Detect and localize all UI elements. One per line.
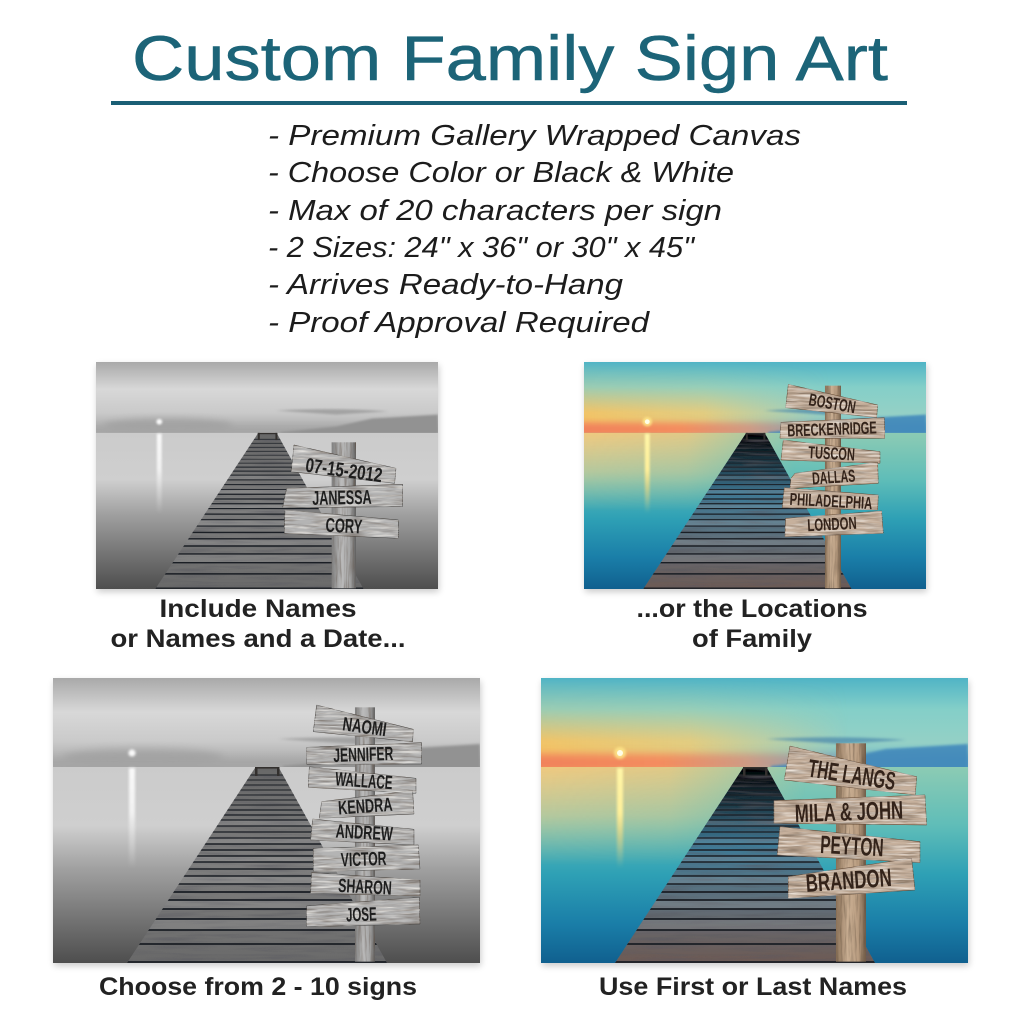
- signpost: eight names: NAOMI: [341, 714, 388, 741]
- caption: names and date: [110, 595, 406, 653]
- signpost: eight names: WALLACE: [335, 769, 393, 794]
- scene: color dock at sunset: [568, 362, 944, 589]
- signpost: locations: TUSCON: [808, 442, 855, 465]
- signpost: eight names: ANDREW: [335, 821, 394, 845]
- caption: names and date: or Names and a Date...: [110, 625, 406, 653]
- signpost: locations: LONDON: [807, 513, 857, 535]
- scene: grayscale dock at sunset: [80, 362, 456, 589]
- title underline: [111, 101, 907, 105]
- signpost: names and date: 07-15-2012: [304, 455, 384, 487]
- signpost: eight names: JOSE: [346, 904, 377, 927]
- signpost: eight names: SHARON: [338, 876, 392, 900]
- feature list: - Arrives Ready-to-Hang: [268, 269, 623, 301]
- feature list: - Proof Approval Required: [268, 307, 650, 339]
- signpost: locations: DALLAS: [811, 466, 856, 488]
- signpost: eight names: JENNIFER: [333, 744, 394, 767]
- signpost: first or last names: MILA & JOHN: [794, 796, 904, 828]
- signpost: first or last names: PEYTON: [820, 831, 884, 862]
- feature list: [268, 120, 801, 339]
- signpost: locations: [780, 384, 885, 588]
- feature list: - Premium Gallery Wrapped Canvas: [268, 120, 801, 152]
- signpost: first or last names: [774, 743, 927, 962]
- signpost: names and date: JANESSA: [312, 487, 372, 510]
- signpost: names and date: [283, 442, 403, 588]
- caption: sign count: Choose from 2 - 10 signs: [99, 973, 417, 1001]
- caption: locations: [636, 595, 868, 653]
- feature list: - 2 Sizes: 24" x 36" or 30" x 45": [268, 232, 696, 264]
- scene: grayscale dock at sunset, large: [33, 678, 503, 963]
- signpost: locations: BRECKENRIDGE: [787, 417, 877, 441]
- panel: black and white canvas with eight signs: [33, 678, 503, 966]
- signpost: locations: BOSTON: [807, 389, 857, 417]
- feature list: - Max of 20 characters per sign: [268, 195, 722, 227]
- feature list: - Choose Color or Black & White: [268, 157, 734, 189]
- signpost: first or last names: THE LANGS: [806, 755, 897, 796]
- signpost: names and date: CORY: [325, 515, 363, 539]
- signpost: locations: PHILADELPHIA: [789, 489, 873, 513]
- signpost: eight names: VICTOR: [340, 849, 387, 871]
- signpost: eight names: KENDRA: [338, 795, 393, 820]
- signpost: first or last names: BRANDON: [805, 864, 893, 898]
- panel: color canvas with family locations: [568, 362, 944, 592]
- caption: names and date: Include Names: [160, 595, 356, 623]
- signpost: eight names: [307, 705, 422, 962]
- panel: color canvas with four signs: [521, 678, 991, 966]
- title: Custom Family Sign Art: [132, 24, 889, 94]
- caption: locations: of Family: [692, 625, 812, 653]
- caption: locations: ...or the Locations: [636, 595, 868, 623]
- caption: first or last names: Use First or Last Names: [599, 973, 907, 1001]
- panel: black and white canvas with names and date: [80, 362, 456, 592]
- scene: color dock at sunset, large: [521, 678, 991, 963]
